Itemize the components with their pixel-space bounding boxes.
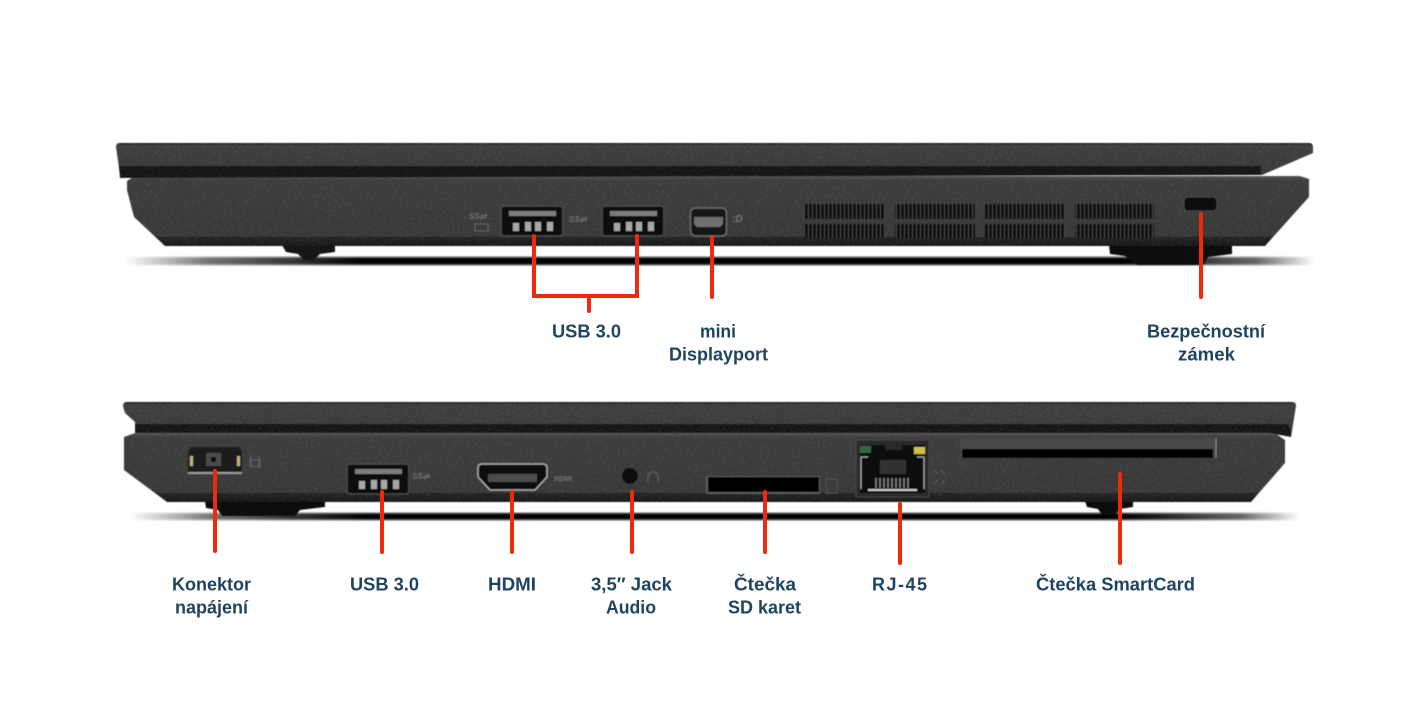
callout: SD card reader xyxy=(728,492,801,618)
mini DisplayPort xyxy=(690,208,743,236)
surface texture xyxy=(116,143,1313,246)
laptop: right side view xyxy=(116,143,1315,265)
RJ-45 ethernet port xyxy=(856,440,945,497)
callout: security lock: zámek xyxy=(1178,344,1236,364)
SD card reader xyxy=(706,476,837,494)
callout: power connector: napájení xyxy=(175,598,249,618)
HDMI port: HDMI xyxy=(554,476,572,483)
infographic canvas xyxy=(115,142,1314,618)
callout: USB 3.0 bottom: USB 3.0 xyxy=(350,574,419,594)
floor shadow xyxy=(125,257,1315,265)
callout: SD card reader: Čtečka xyxy=(734,574,797,594)
USB port 2 xyxy=(602,206,664,236)
callout: USB 3.0 top xyxy=(534,236,637,342)
lid groove xyxy=(135,424,1291,437)
lid groove xyxy=(119,166,1261,178)
USB port 1 xyxy=(501,206,563,236)
callout: audio jack xyxy=(591,492,673,618)
mini DisplayPort: :D xyxy=(732,214,743,225)
SS icon marks: SS⇄ xyxy=(569,215,588,224)
laptop: left side view xyxy=(123,402,1300,520)
surface texture xyxy=(123,402,1296,502)
callout: power connector: Konektor xyxy=(172,574,251,594)
rubber feet xyxy=(205,501,1133,516)
security lock slot xyxy=(1184,197,1217,211)
callout: RJ-45: RJ-45 xyxy=(872,574,927,594)
callout: mini Displayport xyxy=(669,237,768,364)
callout: mini Displayport: mini xyxy=(700,322,736,342)
callout: audio jack: 3,5″ Jack xyxy=(591,574,673,594)
callout: security lock: Bezpečnostní xyxy=(1147,322,1266,342)
laptop lid xyxy=(116,143,1313,175)
USB port xyxy=(347,464,409,494)
rubber feet xyxy=(282,245,1232,265)
callout: SD card reader: SD karet xyxy=(728,598,801,618)
callout: audio jack: Audio xyxy=(606,598,656,618)
audio jack xyxy=(622,468,658,484)
callout: security lock xyxy=(1147,214,1266,364)
callout: USB 3.0 bottom xyxy=(350,492,419,594)
power connector xyxy=(188,447,260,474)
callout: HDMI: HDMI xyxy=(488,574,536,594)
SS icon marks xyxy=(469,212,588,231)
laptop lid xyxy=(123,402,1296,437)
HDMI port xyxy=(478,464,572,490)
callout: RJ-45 xyxy=(872,504,927,594)
callout: USB 3.0 top: USB 3.0 xyxy=(552,322,621,342)
SmartCard reader xyxy=(960,438,1216,458)
laptop base xyxy=(127,176,1309,246)
callout: SmartCard reader: Čtečka SmartCard xyxy=(1036,574,1195,594)
callout: HDMI xyxy=(488,492,536,594)
vent grilles xyxy=(805,204,1154,238)
SS icon mark: SS⇄ xyxy=(412,472,431,481)
SS icon marks: SS⇄ xyxy=(469,212,488,221)
callout: mini Displayport: Displayport xyxy=(669,344,768,364)
callout: power connector xyxy=(172,471,251,618)
floor shadow xyxy=(130,513,1300,520)
laptop base xyxy=(124,433,1285,502)
